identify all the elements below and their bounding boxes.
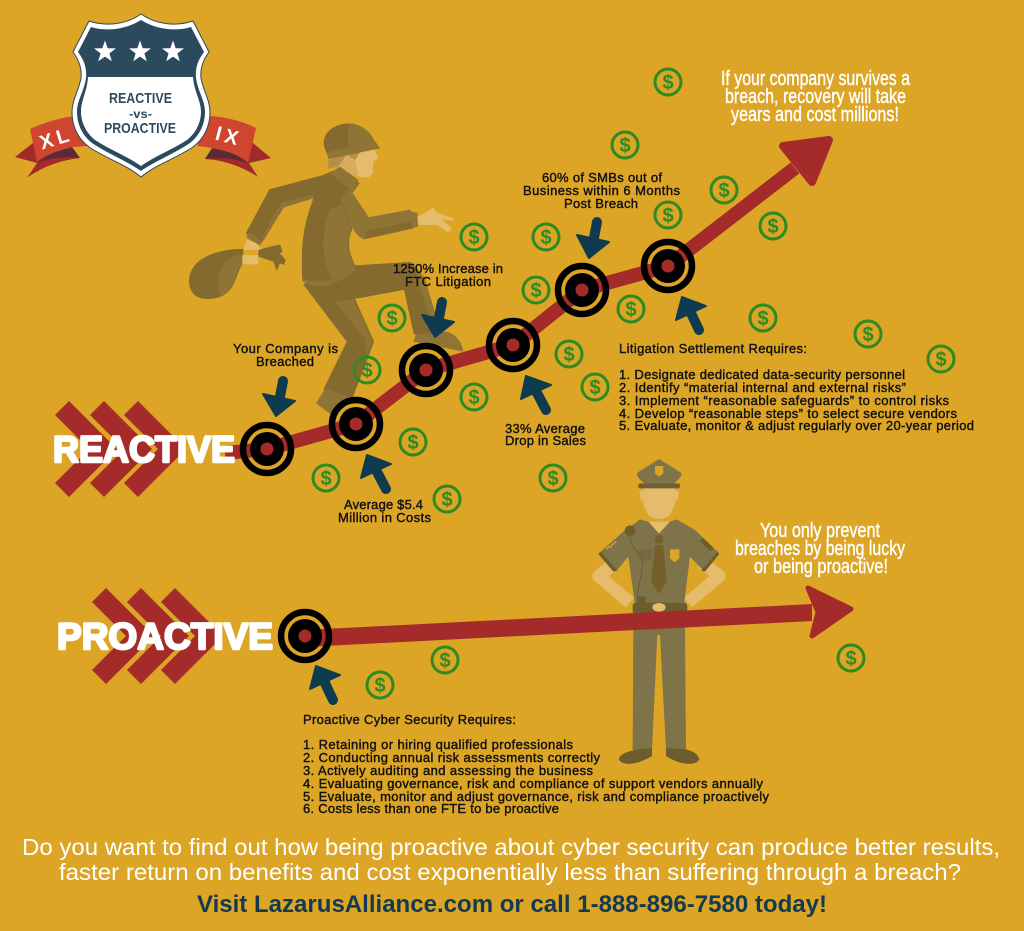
right ribbon: IX: [213, 123, 245, 151]
text block: litigation settlement: 3. Implement “reasonable safeguards” to control risks: [619, 393, 950, 408]
callout: average costs: Million in Costs: [338, 510, 432, 525]
callout: 1250% increase: 1250% Increase in: [393, 261, 503, 276]
arrow: proactive trend line: [305, 588, 851, 647]
dollar coin icons: $: [662, 72, 674, 94]
text block: proactive requirements: 2. Conducting annual risk assessments correctly: [303, 750, 600, 765]
callout: 33% average drop: [505, 421, 586, 448]
text block: litigation settlement: [619, 341, 974, 433]
text block: litigation settlement: 1. Designate dedicated data-security personnel: [619, 367, 905, 382]
dollar coin icons: $: [439, 650, 451, 672]
dollar coin icons: $: [441, 489, 453, 511]
targets on reactive line: [243, 242, 692, 473]
stars: [94, 40, 184, 61]
dollar coin icons: [313, 69, 954, 698]
callout: 33% average drop: 33% Average: [505, 421, 585, 436]
arrow: reactive trend line: [225, 140, 829, 453]
dollar coin icons: $: [589, 377, 601, 399]
callout: 1250% increase: [393, 261, 503, 289]
text block: proactive requirements: 1. Retaining or hiring qualified professionals: [303, 737, 574, 752]
heading: prevent breaches: You only prevent: [760, 520, 880, 542]
text block: proactive requirements: 6. Costs less than one FTE to be proactive: [303, 801, 559, 816]
left ribbon: XL: [37, 124, 76, 154]
closing question: faster return on benefits and cost exponentially less than suffering through a breach?: [59, 859, 961, 885]
right ribbon: [198, 116, 271, 177]
dollar coin icons: $: [374, 675, 386, 697]
heading: prevent breaches: [735, 520, 905, 578]
shield text: -vs-: [129, 107, 152, 121]
thief: back arm and money bag: [189, 177, 320, 299]
text block: litigation settlement: 2. Identify “material internal and external risks”: [619, 380, 906, 395]
shield body: [72, 14, 210, 177]
label: REACTIVE: REACTIVE: [53, 429, 235, 470]
dollar coin icons: $: [625, 299, 637, 321]
text block: proactive requirements: 5. Evaluate, monitor and adjust governance, risk and compliance proactively: [303, 789, 770, 804]
heading: survives a breach: breach, recovery will take: [725, 86, 906, 108]
left ribbon: [15, 116, 88, 178]
target on proactive line: [281, 612, 329, 660]
callout: your company is breached: [233, 341, 338, 369]
callout: 60% of SMBs: [523, 170, 680, 211]
dollar coin icons: $: [718, 180, 730, 202]
chevrons: reactive: [55, 401, 186, 497]
text block: litigation settlement: Litigation Settlement Requires:: [619, 341, 807, 356]
dollar coin icons: $: [320, 468, 332, 490]
shield text: PROACTIVE: [104, 120, 176, 137]
text block: proactive requirements: 3. Actively auditing and assessing the business: [303, 763, 594, 778]
heading: survives a breach: [721, 68, 911, 126]
badge: reactive vs proactive shield: [15, 14, 271, 178]
shield inner panel: [77, 20, 205, 171]
heading: survives a breach: years and cost millions!: [731, 104, 899, 126]
text block: proactive requirements: [303, 712, 770, 816]
call to action: Visit LazarusAlliance.com or call 1-888-896-7580 today!: [197, 891, 827, 918]
dollar coin icons: $: [619, 135, 631, 157]
callout: average costs: Average $5.4: [344, 497, 423, 512]
heading: survives a breach: If your company survives a: [721, 68, 911, 90]
dollar coin icons: $: [468, 387, 480, 409]
callout: your company is breached: Your Company is: [233, 341, 338, 356]
dollar coin icons: $: [386, 308, 398, 330]
heading: prevent breaches: breaches by being lucky: [735, 538, 905, 560]
dollar coin icons: $: [563, 344, 575, 366]
dollar coin icons: $: [662, 205, 674, 227]
dollar coin icons: $: [547, 468, 559, 490]
icon: thief running with money bag: [189, 123, 463, 415]
text block: proactive requirements: Proactive Cyber Security Requires:: [303, 712, 516, 727]
callout: average costs: [338, 497, 432, 525]
dollar coin icons: $: [530, 280, 542, 302]
blue pointer arrows: [263, 222, 706, 700]
shield text: [104, 90, 176, 137]
callout: 60% of SMBs: 60% of SMBs out of: [542, 170, 662, 185]
dollar coin icons: $: [757, 308, 769, 330]
text block: litigation settlement: 5. Evaluate, monitor & adjust regularly over 20-year period: [619, 418, 974, 433]
callout: 33% average drop: Drop in Sales: [505, 433, 586, 448]
dollar coin icons: $: [767, 216, 779, 238]
dollar coin icons: $: [845, 648, 857, 670]
callout: 1250% increase: FTC Litigation: [405, 274, 491, 289]
dollar coin icons: $: [468, 227, 480, 249]
dollar coin icons: $: [935, 349, 947, 371]
thief: body, legs and head: [302, 123, 463, 415]
dollar coin icons: $: [862, 324, 874, 346]
closing question: [22, 834, 1000, 885]
shield text: REACTIVE: [109, 90, 172, 107]
heading: prevent breaches: or being proactive!: [754, 556, 888, 578]
text block: proactive requirements: 4. Evaluating governance, risk and compliance of support vendors annually: [303, 776, 764, 791]
label: PROACTIVE: PROACTIVE: [57, 616, 273, 657]
dollar coin icons: $: [361, 360, 373, 382]
icon: police officer: [598, 459, 719, 764]
closing question: Do you want to find out how being proactive about cyber security can produce better results,: [22, 834, 1000, 860]
dollar coin icons: $: [407, 432, 419, 454]
text block: litigation settlement: 4. Develop “reasonable steps” to select secure vendors: [619, 406, 958, 421]
chevrons: proactive: [92, 588, 223, 684]
callout: 60% of SMBs: Business within 6 Months: [523, 183, 680, 198]
dollar coin icons: $: [540, 227, 552, 249]
callout: your company is breached: Breached: [256, 354, 314, 369]
callout: 60% of SMBs: Post Breach: [564, 196, 638, 211]
